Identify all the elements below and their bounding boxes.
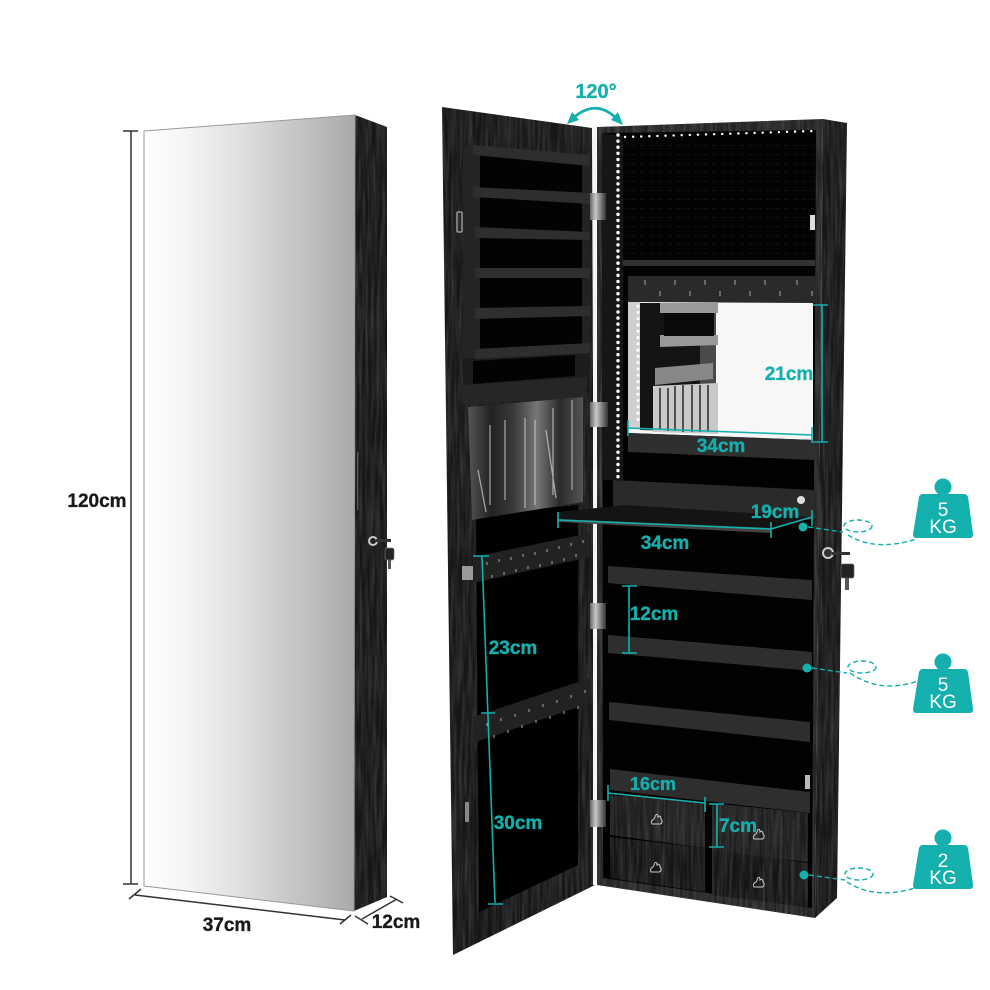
dimension: height 120cm: 120cm [67, 491, 127, 512]
drawer handles [651, 814, 764, 887]
pouch bar [462, 377, 587, 405]
clear jewelry pouch [468, 397, 583, 520]
side slot [357, 452, 358, 510]
vertical LED strip [616, 135, 620, 478]
side lock and key [823, 548, 854, 590]
open cabinet body [558, 119, 854, 918]
dimension: drawer height 7cm: 7cm [719, 816, 757, 837]
lower shelves [608, 566, 812, 813]
dimension: mirror height 21cm: 21cm [765, 364, 813, 385]
dimension: mirror width 34cm: 34cm [697, 436, 745, 457]
four drawers [610, 795, 808, 907]
open door panel [442, 107, 595, 955]
dimension: depth 12cm: 12cm [372, 912, 420, 933]
cabinet side panel [354, 115, 387, 911]
door latches [457, 212, 473, 822]
hinges [590, 193, 608, 827]
white gap between door and cabinet [593, 128, 596, 885]
black gap below rack [473, 355, 575, 384]
hook bar [628, 276, 815, 303]
full-length mirror [144, 115, 355, 911]
callout: shelf load 5 KG [798, 478, 973, 545]
weight icon: 5 [938, 675, 948, 696]
upper pegboard compartment [623, 137, 815, 260]
weight icon: 2 [938, 851, 948, 872]
lower bar below mirror [628, 433, 815, 460]
dimensions: door hook spacing 23cm and 30cm [473, 556, 542, 904]
dimension: mirror height 21cm [765, 305, 828, 442]
dimension: door opening angle 120 degrees: 120° [575, 81, 617, 103]
door top recess [463, 145, 590, 405]
dimension: width 37cm [129, 889, 351, 936]
compartment latches [805, 215, 815, 789]
interior cavity [602, 130, 816, 908]
upper shelf [623, 260, 815, 266]
work board [613, 480, 815, 520]
dimension: width 37cm: 37cm [203, 915, 251, 936]
dimension: door opening angle 120 degrees [567, 81, 623, 125]
dimension: shelf width 34cm: 34cm [641, 533, 689, 554]
dimension: shelf depth 19cm [751, 502, 812, 529]
callout: shelf load 5 KG [802, 654, 973, 713]
weight icon: KG [929, 517, 957, 538]
dimension: depth 12cm [355, 896, 420, 933]
inner mirror [628, 302, 813, 440]
top LED strip [625, 131, 815, 137]
dimension: shelf spacing 12cm [622, 586, 678, 653]
side lock and key [369, 537, 394, 569]
callout: drawer load 2 KG [800, 830, 973, 893]
dimension: drawer width 16cm [608, 774, 705, 812]
closed cabinet with mirror [144, 115, 394, 911]
earring rack [463, 145, 592, 359]
weight icon [913, 478, 973, 538]
weight icon [913, 654, 973, 713]
door frame [442, 107, 595, 955]
left inner wall [602, 133, 623, 480]
weight icon: KG [929, 868, 957, 889]
dimension: mirror width 34cm [628, 420, 812, 457]
dimension: height 120cm [67, 131, 138, 884]
weight icon: 5 [938, 500, 948, 521]
pull-out shelf [558, 505, 812, 530]
front frame [597, 119, 823, 918]
weight icon: KG [929, 692, 957, 713]
lock cylinder [797, 496, 805, 504]
weight icon [913, 830, 973, 889]
dimension: shelf spacing 12cm: 12cm [630, 604, 678, 625]
dimensions: door hook spacing 23cm and 30cm: 30cm [494, 813, 542, 834]
dimension: shelf depth 19cm: 19cm [751, 502, 799, 523]
dimensions: door hook spacing 23cm and 30cm: 23cm [489, 638, 537, 659]
dimension: drawer height 7cm [709, 804, 757, 847]
dimension: shelf width 34cm [558, 512, 771, 554]
lower door recess [476, 505, 578, 912]
dimension: drawer width 16cm: 16cm [630, 774, 676, 794]
necklace hook bars [473, 533, 590, 743]
outer side panel [815, 119, 847, 918]
mirror reflection of door [628, 302, 718, 434]
mirror LED strip [636, 306, 640, 424]
